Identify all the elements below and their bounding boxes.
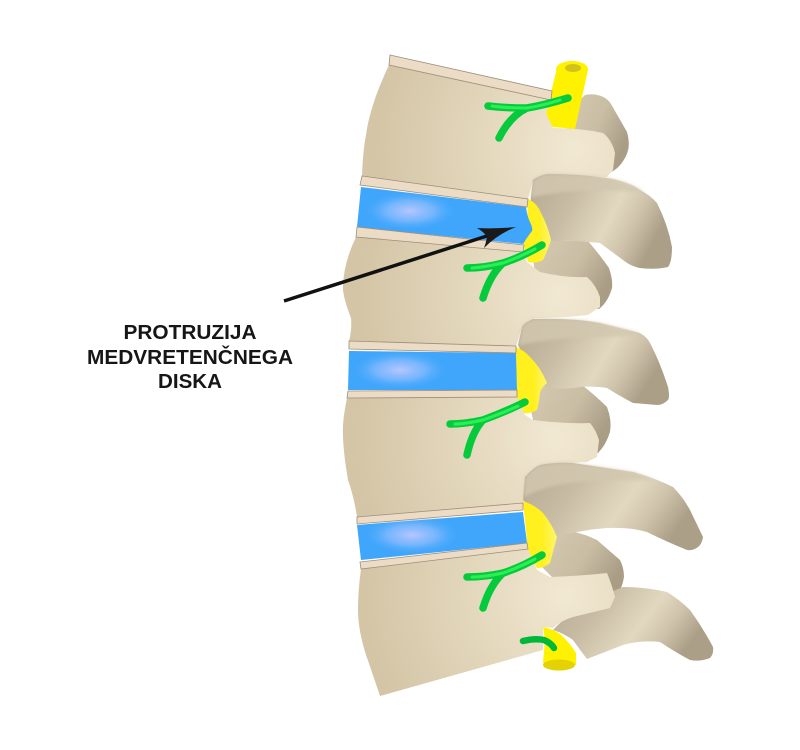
vertebra 3 rear facet [525,385,611,453]
label: MEDVRETENČNEGA [87,345,293,369]
spinous process 3 [523,463,703,550]
arrow [284,227,516,301]
nerve 5 [523,639,554,648]
upper vertebra rear facet [560,94,629,172]
endplate 3 [356,227,524,252]
nerve 2 [467,245,542,298]
label: DISKA [158,371,222,393]
spinous process 1 upper shade [531,174,645,198]
vertebra 4 rear facet [535,530,624,598]
label: PROTRUZIJA [124,322,256,344]
endplate 5 [347,390,517,398]
lumbar spine [343,55,713,696]
bulging disc yellow 3 [523,501,557,568]
spinal cord lower segment [543,627,576,670]
spinous process 4 [553,587,713,661]
bulging disc yellow 2 [516,347,547,413]
vertebra 3 [343,397,599,517]
vertebra 1 [362,65,615,199]
nerve 1 [488,98,568,138]
spinal cord upper segment [546,61,588,129]
nerve 4 [467,555,542,608]
vertebra 2 [343,237,600,346]
spinous process 3 upper shade [524,463,655,497]
endplate 1 [389,55,552,100]
label [87,322,293,393]
disc 3 [357,512,527,560]
disc 2 [348,350,517,390]
spinous process 2 upper shade [519,319,640,345]
endplate 4 [349,341,516,353]
spinous process 2 [518,319,669,405]
nerve 3 [450,402,525,455]
endplate 6 [357,503,523,524]
endplate 2 [360,176,528,207]
spinous process 1 [530,174,672,269]
vertebra 4 [358,549,615,696]
vertebra 2 rear facet [530,240,612,309]
disc 1 [357,187,532,244]
endplate 7 [360,543,528,569]
bulging disc yellow 1 [523,199,551,263]
